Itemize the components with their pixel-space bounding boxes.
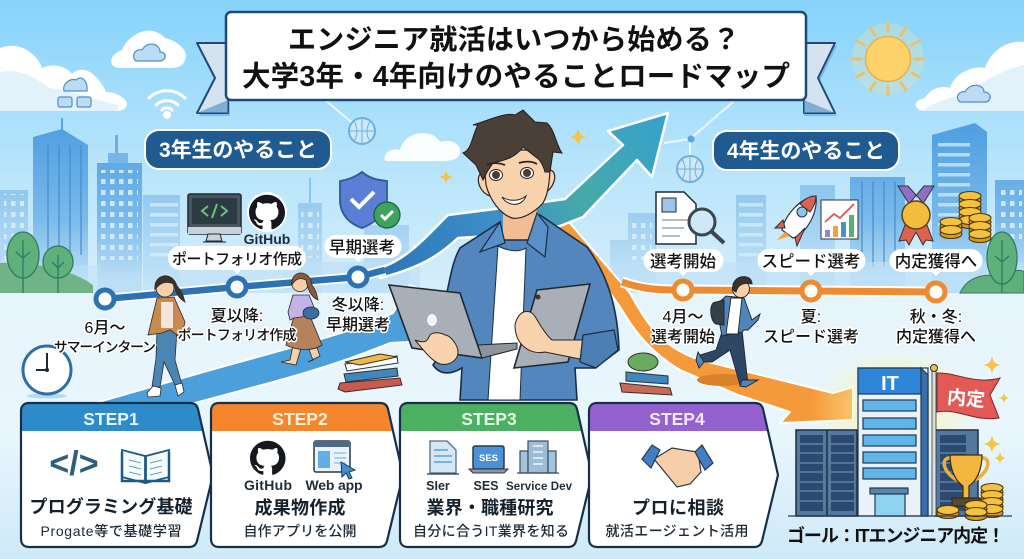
sparkle small [439,170,453,184]
icon: rocket and chart [775,196,858,246]
icon: code: </> [49,445,99,483]
central character [389,110,619,400]
cloud right [916,42,1024,111]
panel: step 4: STEP4 [649,409,705,429]
icon: medal [898,186,934,245]
shirt [433,215,619,400]
cloud top left with upload icon [0,46,127,111]
trophy [944,455,988,506]
label: summer portfolio: 夏以降: [211,307,263,325]
callout: portfolio [168,246,306,274]
wifi icon [149,91,185,118]
label: June summer intern: 6月～ [85,320,125,337]
rolled sleeve [580,330,618,368]
icon: GitHub: GitHub [244,231,290,247]
label: April start: 選考開始 [651,328,715,346]
callout: speed selection: スピード選考 [762,252,860,271]
IT building [858,368,928,516]
right city skyline [610,123,1024,293]
eyes [487,162,537,180]
icon: SES laptop [469,446,508,473]
title banner: 大学3年・4年向けのやることロードマップ [242,61,790,93]
label: June summer intern [54,320,156,355]
panel: step 4: 就活エージェント活用 [606,523,748,539]
node: summer [228,278,246,296]
goal coins [937,484,1003,520]
icon: open book [122,450,169,483]
label: summer speed: 夏: [801,308,821,326]
rising growth arrow [380,113,668,278]
icon: GitHub logo [250,441,286,475]
IT building: IT [881,373,899,395]
sparkle [569,128,587,146]
panel: step 3: 自分に合うIT業界を知る [413,523,569,539]
panel: step 2: GitHub [244,477,292,493]
label: April start: 4月～ [663,309,703,326]
panel: step 2: STEP2 [272,409,328,429]
panel: step 4: プロに相談 [632,498,724,518]
left hand [415,333,458,364]
title ribbon tails [197,43,837,116]
panel: step 2: Web app [306,477,362,493]
cloud top centre-left [111,31,186,68]
server racks [796,430,978,516]
callout: selection start: 選考開始 [650,252,716,271]
timeline: third year [96,268,385,308]
icon: document [427,441,459,474]
sun [852,23,924,95]
icon: GitHub [244,192,290,247]
goal glow [810,345,980,475]
panel: step 2: 成果物作成 [254,497,346,518]
hair [463,110,562,180]
icon: coins stack [940,192,991,242]
label: June summer intern: サマーインターン [54,339,156,355]
collars [480,213,548,257]
books left [338,354,402,392]
label: winter early selection: 早期選考 [326,316,390,334]
icon: clock [23,346,71,398]
hill [0,263,93,293]
panel: step 1 [21,403,213,547]
road: third-year path [95,285,450,403]
node: April [674,281,692,299]
panel: step 3: Service Dev [506,481,573,493]
label: winter early selection [326,296,390,334]
panel: step 1: STEP1 [83,409,139,429]
ears [478,170,555,196]
goal caption: ゴール：ITエンジニア内定！ [787,525,1005,546]
callout: early selection [324,235,402,262]
icon: shield check [340,172,400,228]
label: autumn winter offer: 内定獲得へ [896,327,976,346]
label: winter early selection: 冬以降: [332,296,384,314]
label: autumn winter offer [896,308,976,346]
laptop [389,285,482,358]
node: June [96,290,114,308]
books right [620,353,672,395]
icon: resume with magnifier [656,192,724,244]
goal ground line [788,515,1012,517]
t-shirt [488,246,526,400]
flag 内定 [930,364,1000,516]
right arm and hand [515,311,588,360]
tree small [43,246,73,278]
callout: selection start [644,249,724,276]
heading: fourth-year tasks [713,131,899,170]
heading: third-year tasks [145,130,331,169]
callout: early selection: 早期選考 [329,238,395,257]
panel: step 3: STEP3 [461,409,517,429]
icon: code monitor [188,194,241,242]
network lines and globes [325,100,733,182]
woman walking with brown skirt [281,273,322,365]
bush [960,270,1024,293]
callout: portfolio: ポートフォリオ作成 [172,251,302,268]
flag 内定: 内定 [946,386,986,412]
panel: step 3: SES [473,479,499,493]
title banner [226,12,806,100]
label: summer portfolio [178,307,296,343]
left city skyline [0,118,420,293]
title banner: エンジニア就活はいつから始める？ [288,24,740,55]
panel: step 1: Progate等で基礎学習 [40,523,182,539]
woman walking with orange jacket [147,276,185,397]
tree large [7,232,39,278]
tree [987,232,1017,284]
icon: office building [517,441,559,473]
cloud centre [385,133,460,161]
panel: step 2: 自作アプリを公開 [244,523,356,539]
node: winter [349,268,367,286]
panel: step 3 [400,403,592,547]
callout: speed selection [758,249,866,276]
node: 夏 [802,282,820,300]
panel: step 3: SIer [426,479,450,493]
icon: handshake [642,445,713,487]
panel: step 3: 業界・職種研究 [426,498,554,518]
timeline: fourth year [622,281,945,301]
panel: step 1: プログラミング基礎 [30,496,192,517]
label: autumn winter offer: 秋・冬: [910,308,962,326]
tablet [514,284,590,368]
sparkles by goal [983,356,1009,464]
icon: SES laptop: SES [479,453,498,464]
callout: offer [890,249,982,276]
face [483,150,550,218]
label: summer portfolio: ポートフォリオ作成 [178,327,296,343]
panel: step 2 [211,403,403,547]
callout: offer: 内定獲得へ [895,252,977,271]
node: 秋冬 [927,283,945,301]
panel: step 4 [589,403,778,547]
label: summer speed [763,308,859,346]
smile [502,196,526,204]
heading: fourth-year tasks: 4年生のやること [727,140,885,163]
heading: third-year tasks: 3年生のやること [159,139,317,162]
label: April start [651,309,715,346]
running man [696,277,760,387]
icon: web app window [314,441,355,479]
neck [503,205,537,250]
road: fourth-year orange arrow [550,215,853,423]
label: summer speed: スピード選考 [763,328,859,346]
